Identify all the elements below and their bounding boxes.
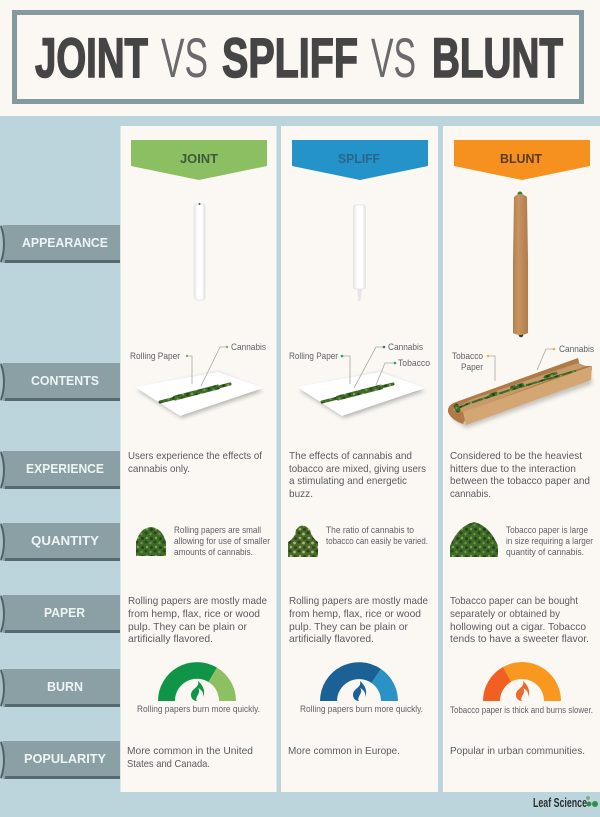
burn caption: joint: Rolling papers burn more quickly. bbox=[137, 704, 260, 714]
contents diagram: spliff: Rolling Paper bbox=[289, 351, 338, 362]
paper text: joint: pulp. They can be plain or bbox=[128, 621, 247, 633]
quantity text: spliff bbox=[326, 525, 428, 546]
contents diagram: joint: Rolling Paper bbox=[130, 351, 180, 362]
banner: blunt bbox=[454, 140, 590, 180]
paper text: blunt: tends to have a sweeter flavor. bbox=[450, 633, 589, 645]
icon: cannabis pile small bbox=[136, 527, 166, 556]
row label: popularity bbox=[0, 741, 120, 779]
paper text: blunt: separately or obtained by bbox=[450, 608, 561, 620]
illustration: spliff bbox=[354, 205, 366, 301]
experience text: blunt: hitters due to the interaction bbox=[450, 463, 576, 475]
experience text: spliff: tobacco are mixed, giving users bbox=[289, 463, 426, 475]
banner: joint bbox=[131, 140, 267, 180]
experience text: blunt: cannabis. bbox=[450, 488, 491, 500]
row label: quantity bbox=[0, 523, 120, 561]
quantity: blunt bbox=[450, 522, 593, 557]
paper text: spliff: pulp. They can be plain or bbox=[289, 621, 408, 633]
icon: cannabis and tobacco pile bbox=[288, 526, 318, 557]
quantity text: joint: Rolling papers are small bbox=[174, 525, 261, 535]
experience text: joint bbox=[128, 450, 262, 475]
quantity text: blunt: quantity of cannabis. bbox=[506, 547, 584, 557]
quantity: spliff bbox=[288, 525, 428, 557]
panel: spliff bbox=[281, 126, 438, 792]
row label: contents bbox=[0, 363, 120, 401]
contents diagram: blunt: Tobacco bbox=[452, 351, 483, 362]
burn caption: spliff: Rolling papers burn more quickly. bbox=[300, 704, 423, 714]
contents diagram: joint: Cannabis bbox=[231, 342, 266, 353]
title bbox=[14, 12, 582, 102]
banner: spliff: SPLIFF bbox=[338, 151, 380, 166]
illustration: joint bbox=[194, 203, 205, 300]
quantity text: blunt: Tobacco paper is large bbox=[506, 525, 588, 535]
row label: appearance bbox=[0, 225, 120, 263]
panel: blunt bbox=[443, 126, 600, 792]
experience text: joint: Users experience the effects of bbox=[128, 450, 262, 462]
title: VS bbox=[161, 26, 208, 89]
row label: paper: PAPER bbox=[44, 605, 86, 620]
contents diagram: spliff: Tobacco bbox=[398, 358, 430, 369]
popularity text: joint: States and Canada. bbox=[127, 758, 210, 770]
experience text: spliff: a stimulating and energetic bbox=[289, 475, 407, 487]
paper text: blunt bbox=[450, 595, 589, 645]
contents diagram: blunt: Cannabis bbox=[559, 344, 594, 355]
quantity text: spliff: The ratio of cannabis to bbox=[326, 525, 414, 535]
experience text: spliff: buzz. bbox=[289, 488, 313, 500]
row label: popularity: POPULARITY bbox=[24, 751, 106, 766]
paper text: joint: Rolling papers are mostly made bbox=[128, 595, 267, 607]
row label: contents: CONTENTS bbox=[31, 373, 99, 388]
paper text: spliff bbox=[289, 595, 428, 645]
popularity text: joint bbox=[127, 745, 253, 770]
icon: cannabis pile large bbox=[450, 522, 498, 557]
popularity text: spliff: More common in Europe. bbox=[288, 745, 400, 757]
row label: experience bbox=[0, 451, 120, 489]
contents diagram: joint bbox=[130, 342, 266, 418]
burn gauge: blunt bbox=[483, 662, 561, 701]
paper text: joint: from hemp, flax, rice or wood bbox=[128, 608, 260, 620]
burn gauge: joint bbox=[158, 662, 236, 701]
paper text: spliff: from hemp, flax, rice or wood bbox=[289, 608, 421, 620]
paper text: spliff: Rolling papers are mostly made bbox=[289, 595, 428, 607]
quantity text: blunt: in size requiring a larger bbox=[506, 536, 593, 546]
title: SPLIFF bbox=[222, 26, 358, 89]
paper text: joint: artificially flavored. bbox=[128, 633, 213, 645]
paper text: joint bbox=[128, 595, 267, 645]
contents diagram: blunt bbox=[448, 344, 594, 428]
contents diagram: spliff bbox=[289, 342, 430, 418]
popularity text: joint: More common in the United bbox=[127, 745, 253, 757]
experience text: joint: cannabis only. bbox=[128, 463, 190, 475]
paper text: blunt: Tobacco paper can be bought bbox=[450, 595, 578, 607]
quantity: joint bbox=[136, 525, 270, 557]
row label: experience: EXPERIENCE bbox=[26, 461, 104, 476]
experience text: blunt bbox=[450, 450, 590, 500]
banner: joint: JOINT bbox=[180, 151, 218, 166]
title: JOINT bbox=[35, 26, 148, 89]
banner: spliff bbox=[292, 140, 428, 180]
quantity text: spliff: tobacco can easily be varied. bbox=[326, 536, 428, 546]
experience text: blunt: between the tobacco paper and bbox=[450, 475, 590, 487]
quantity text: blunt bbox=[506, 525, 593, 557]
row label: appearance: APPEARANCE bbox=[22, 235, 108, 250]
row label: quantity: QUANTITY bbox=[31, 533, 99, 548]
contents diagram: blunt: Paper bbox=[461, 362, 483, 373]
row label: paper bbox=[0, 595, 120, 633]
popularity text: blunt: Popular in urban communities. bbox=[450, 745, 585, 757]
title: VS bbox=[371, 26, 416, 89]
paper text: blunt: hollowing out a cigar. Tobacco bbox=[450, 621, 586, 633]
quantity text: joint: amounts of cannabis. bbox=[174, 547, 253, 557]
quantity text: joint: allowing for use of smaller bbox=[174, 536, 270, 546]
row label: burn: BURN bbox=[47, 679, 83, 694]
paper text: spliff: artificially flavored. bbox=[289, 633, 374, 645]
contents diagram: spliff: Cannabis bbox=[388, 342, 423, 353]
banner: blunt: BLUNT bbox=[500, 151, 542, 166]
experience text: spliff: The effects of cannabis and bbox=[289, 450, 412, 462]
burn gauge: spliff bbox=[320, 662, 398, 701]
panel: joint bbox=[120, 126, 276, 792]
row label: burn bbox=[0, 669, 120, 707]
quantity text: joint bbox=[174, 525, 270, 557]
illustration: blunt bbox=[513, 192, 528, 337]
experience text: spliff bbox=[289, 450, 426, 500]
experience text: blunt: Considered to be the heaviest bbox=[450, 450, 582, 462]
